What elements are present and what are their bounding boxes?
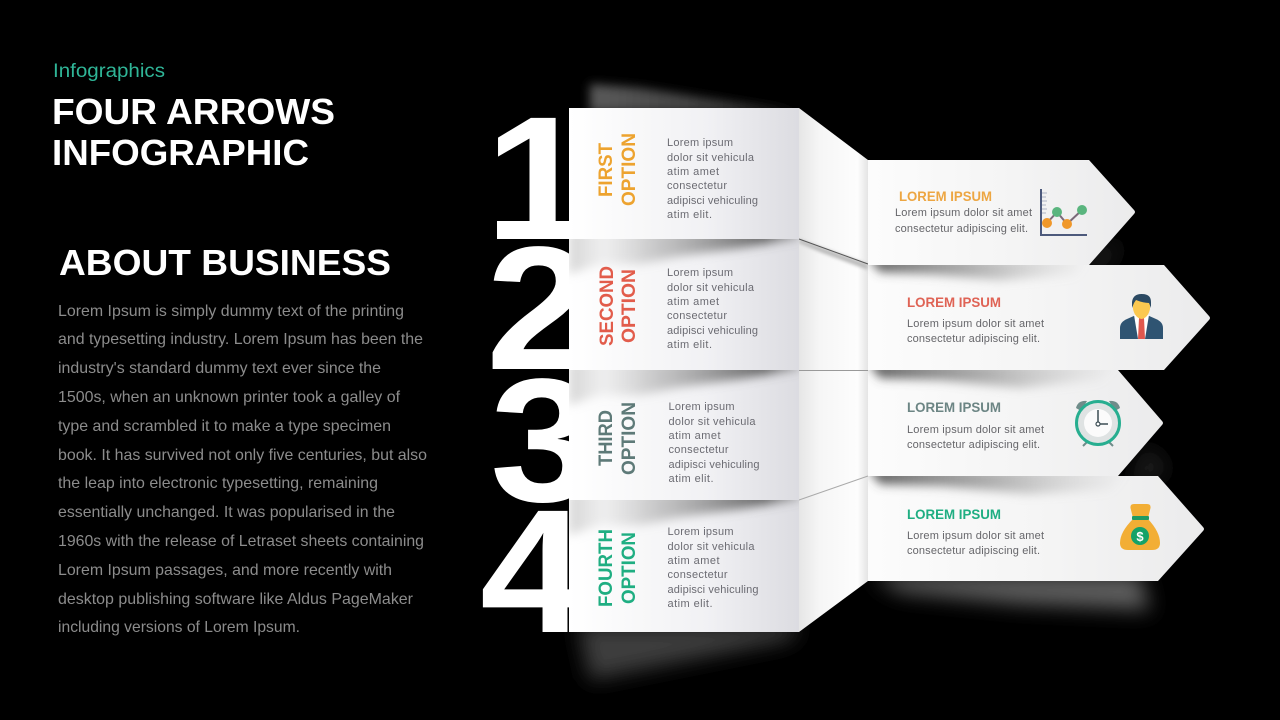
- title: [52, 91, 335, 173]
- option label: second: [597, 266, 640, 346]
- arrow 1 text: [895, 207, 1032, 235]
- icon: money bag: $: [1136, 529, 1144, 544]
- eyebrow: Infographics: [53, 61, 165, 82]
- arrow 2 title: LOREM IPSUM: [907, 294, 1001, 310]
- panel shadow: [569, 370, 799, 406]
- option label: fourth: [596, 529, 640, 607]
- body text: second: Lorem ipsum: [667, 267, 733, 279]
- body text: third: dolor sit vehicula: [668, 416, 756, 428]
- body text: first: atim amet: [667, 166, 719, 178]
- body text: second: atim elit.: [667, 339, 712, 351]
- paragraph: Lorem Ipsum passages, and more recently with: [58, 562, 392, 579]
- body text: second: atim amet: [667, 296, 719, 308]
- arrow 3 text: [907, 424, 1044, 451]
- body text: first: dolor sit vehicula: [667, 152, 755, 164]
- body text: second: adipisci vehiculing: [667, 325, 758, 337]
- panel: third option: [569, 361, 799, 500]
- body text: third: atim elit.: [668, 473, 714, 485]
- arrow 2 text: consectetur adipiscing elit.: [907, 333, 1040, 345]
- panel: fourth option: [569, 491, 799, 632]
- option label: third: THIRD: [596, 410, 617, 466]
- body text: fourth: Lorem ipsum: [668, 526, 734, 538]
- paragraph: type and scrambled it to make a type specimen: [58, 418, 391, 435]
- arrow 4 text: Lorem ipsum dolor sit amet: [907, 530, 1044, 542]
- title: INFOGRAPHIC: [52, 132, 309, 173]
- body text: fourth: consectetur: [668, 569, 728, 581]
- body text: second: dolor sit vehicula: [667, 282, 755, 294]
- body text: first: atim elit.: [667, 209, 712, 221]
- option label: first: [596, 133, 640, 206]
- infographic canvas: [54, 63, 1210, 688]
- arrow 4 text: [907, 530, 1044, 557]
- option label: fourth: FOURTH: [596, 529, 617, 607]
- arrow shadow: [868, 370, 1096, 392]
- arrow 1: [868, 160, 1135, 265]
- body text: third: Lorem ipsum: [668, 401, 734, 413]
- paragraph: [58, 303, 427, 636]
- arrow 4: [868, 469, 1204, 581]
- arrow 2: [868, 258, 1210, 370]
- body text: first: consectetur: [667, 180, 727, 192]
- paragraph: and typesetting industry. Lorem Ipsum has been the: [58, 331, 423, 348]
- number 1: 1: [485, 81, 591, 277]
- icon: money bag: [1120, 504, 1160, 550]
- number 4: 4: [480, 474, 586, 670]
- body text: fourth: atim elit.: [668, 598, 712, 610]
- paragraph: 1500s, when an unknown printer took a galley of: [58, 389, 401, 406]
- option label: third: OPTION: [619, 402, 640, 475]
- arrow 1 text: consectetur adipiscing elit.: [895, 223, 1028, 235]
- icon: alarm clock: [1076, 401, 1120, 446]
- option label: first: FIRST: [596, 143, 617, 197]
- body text: fourth: [668, 526, 758, 610]
- big numbers: [480, 81, 596, 670]
- body text: fourth: atim amet: [668, 555, 720, 567]
- paragraph: the leap into electronic typesetting, remaining: [58, 475, 378, 492]
- paragraph: 1960s with the release of Letraset sheets containing: [58, 533, 424, 550]
- heading: about business: ABOUT BUSINESS: [59, 242, 391, 283]
- panel shadow: [569, 500, 799, 536]
- arrow shadow: [868, 476, 1106, 498]
- panel: first option: [569, 108, 799, 239]
- arrow 3: [868, 363, 1163, 476]
- background glows: [578, 84, 1170, 680]
- body text: third: consectetur: [668, 444, 729, 456]
- body text: first: adipisci vehiculing: [667, 195, 758, 207]
- body text: first: [667, 137, 758, 221]
- arrow 3 text: Lorem ipsum dolor sit amet: [907, 424, 1044, 436]
- option label: third: [596, 402, 640, 475]
- body text: first: Lorem ipsum: [667, 137, 733, 149]
- arrow 2 text: [907, 318, 1044, 345]
- paragraph: desktop publishing software like Aldus PageMaker: [58, 591, 414, 608]
- body text: third: atim amet: [668, 430, 720, 442]
- paragraph: essentially unchanged. It was popularised in the: [58, 504, 395, 521]
- arrow 4 text: consectetur adipiscing elit.: [907, 545, 1040, 557]
- arrow 3 text: consectetur adipiscing elit.: [907, 439, 1040, 451]
- arrow 2 text: Lorem ipsum dolor sit amet: [907, 318, 1044, 330]
- arrow 3 title: LOREM IPSUM: [907, 399, 1001, 415]
- icon: businessman: [1120, 294, 1163, 339]
- number 2: 2: [486, 211, 592, 407]
- option label: first: OPTION: [619, 133, 640, 206]
- body text: third: [668, 401, 760, 485]
- arrow 1 title: LOREM IPSUM: [899, 188, 992, 204]
- fold band: [799, 108, 868, 632]
- body text: third: adipisci vehiculing: [668, 459, 760, 471]
- number 3: 3: [490, 343, 596, 539]
- paragraph: industry's standard dummy text ever since the: [58, 360, 381, 377]
- paragraph: book. It has survived not only five centuries, but also: [58, 447, 427, 464]
- body text: fourth: dolor sit vehicula: [668, 541, 755, 553]
- arrow shadow: [868, 265, 1070, 284]
- panel: second option: [569, 230, 799, 370]
- option label: second: SECOND: [597, 266, 618, 346]
- paragraph: including versions of Lorem Ipsum.: [58, 619, 300, 636]
- paragraph: Lorem Ipsum is simply dummy text of the printing: [58, 303, 404, 320]
- icon: line chart: [1041, 189, 1087, 235]
- panel shadow: [569, 239, 799, 275]
- body text: second: consectetur: [667, 310, 727, 322]
- title: FOUR ARROWS: [52, 91, 335, 132]
- body text: second: [667, 267, 758, 351]
- arrow 1 text: Lorem ipsum dolor sit amet: [895, 207, 1032, 219]
- body text: fourth: adipisci vehiculing: [668, 584, 758, 596]
- option label: fourth: OPTION: [619, 532, 640, 604]
- option label: second: OPTION: [619, 269, 640, 343]
- arrow 4 title: LOREM IPSUM: [907, 506, 1001, 522]
